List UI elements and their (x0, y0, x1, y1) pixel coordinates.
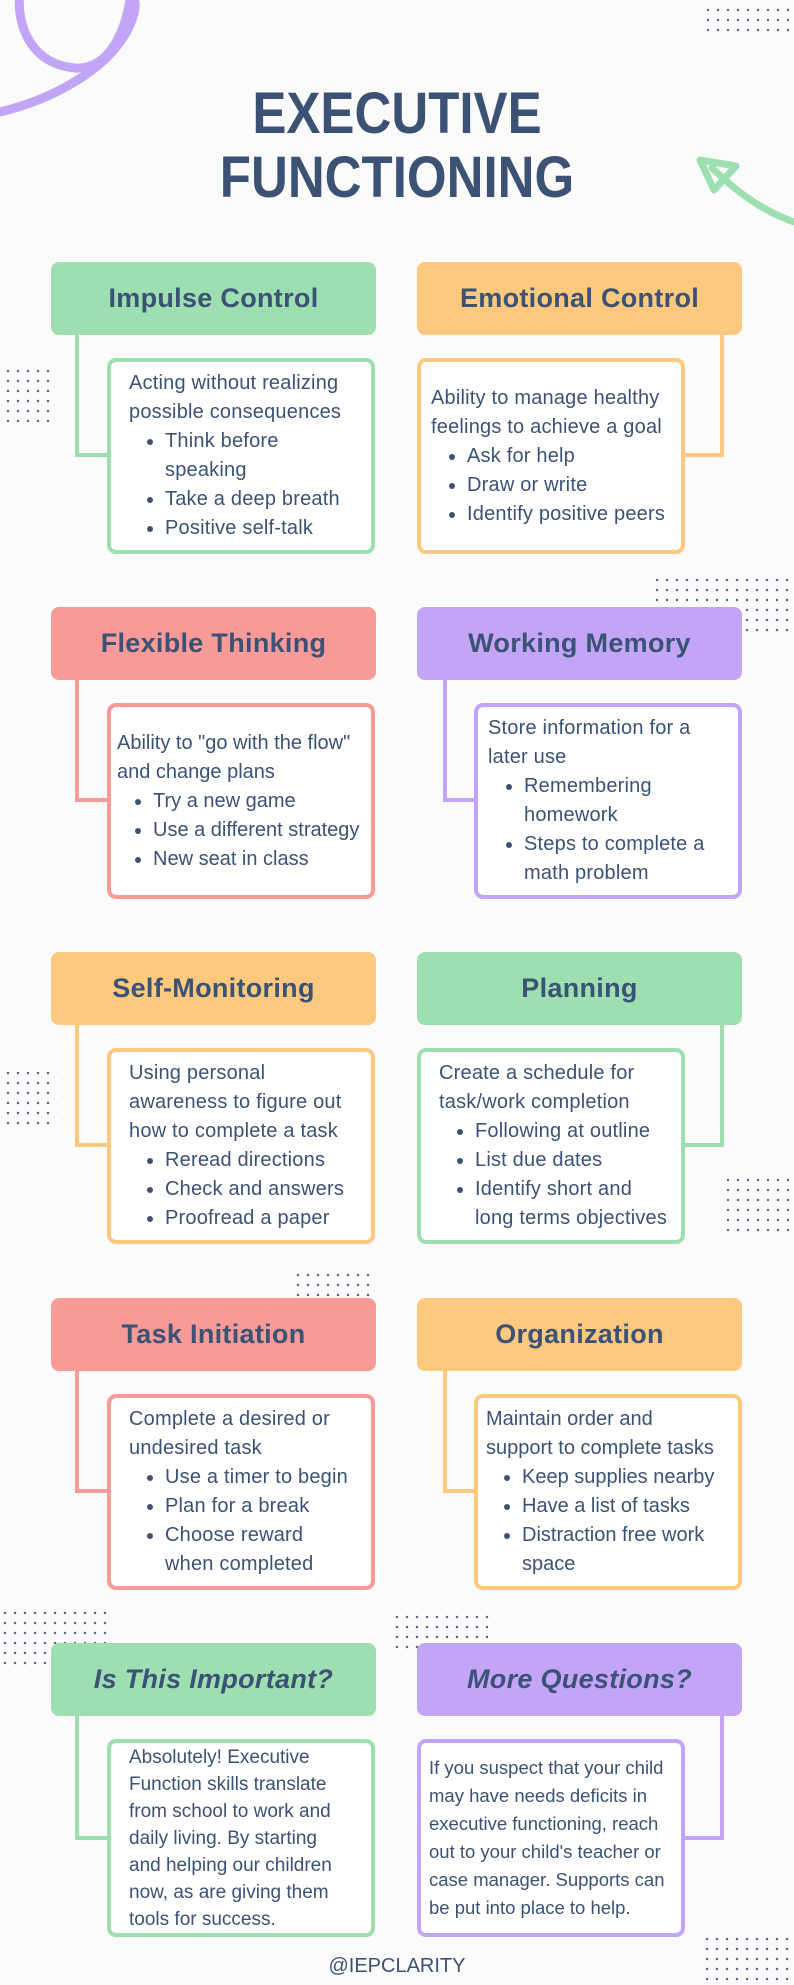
card: Organization (417, 1298, 742, 1590)
card: Flexible Thinking (51, 607, 376, 899)
card: Planning (417, 952, 742, 1244)
body: when completed (165, 1553, 313, 1575)
header: Self-Monitoring (112, 973, 315, 1003)
card: Is This Important? (51, 1643, 376, 1937)
body: Positive self-talk (165, 517, 313, 539)
header (51, 607, 376, 680)
body (107, 703, 375, 899)
body: Take a deep breath (165, 488, 340, 510)
body: Store information for a (488, 717, 690, 739)
card: Task Initiation (51, 1298, 376, 1590)
card: Impulse Control (51, 262, 376, 554)
decoration: purple loop (0, 0, 140, 116)
body: Identify short and (475, 1178, 632, 1200)
body: Ability to "go with the flow" (117, 732, 350, 754)
body: long terms objectives (475, 1207, 667, 1229)
body (417, 1048, 685, 1244)
body: out to your child's teacher or (429, 1841, 661, 1862)
body: and helping our children (129, 1854, 332, 1876)
header (51, 952, 376, 1025)
body (107, 1048, 375, 1244)
header (417, 952, 742, 1025)
header (417, 1298, 742, 1371)
footer handle: @IEPCLARITY (328, 1955, 466, 1977)
body: Try a new game (153, 790, 296, 812)
body: Following at outline (475, 1120, 650, 1142)
card: Self-Monitoring (51, 952, 376, 1244)
body: Ability to manage healthy (431, 386, 659, 408)
body: possible consequences (129, 401, 341, 423)
header (51, 262, 376, 335)
body: executive functioning, reach (429, 1813, 658, 1834)
body: Check and answers (165, 1178, 344, 1200)
header: More Questions? (467, 1664, 692, 1694)
header (417, 607, 742, 680)
body: Have a list of tasks (522, 1495, 690, 1517)
body: now, as are giving them (129, 1882, 329, 1902)
body: If you suspect that your child (429, 1757, 663, 1778)
body: Distraction free work (522, 1524, 704, 1546)
body: Keep supplies nearby (522, 1466, 714, 1488)
body: from school to work and (129, 1800, 331, 1822)
body: Draw or write (467, 474, 587, 496)
body (107, 358, 375, 554)
body: and change plans (117, 760, 275, 782)
body (474, 703, 742, 899)
header (51, 1643, 376, 1716)
body: Use a different strategy (153, 818, 359, 840)
body: Reread directions (165, 1149, 325, 1171)
header: Planning (521, 973, 638, 1003)
header (51, 1298, 376, 1371)
card: More Questions? (417, 1643, 742, 1937)
body (474, 1394, 742, 1590)
title (220, 81, 574, 210)
body: Absolutely! Executive (129, 1746, 310, 1768)
body: undesired task (129, 1437, 262, 1459)
decoration dots (703, 5, 789, 39)
body: support to complete tasks (486, 1437, 714, 1459)
header (417, 262, 742, 335)
body: Choose reward (165, 1524, 303, 1546)
body: Using personal (129, 1062, 265, 1084)
body: daily living. By starting (129, 1828, 317, 1848)
body: tools for success. (129, 1908, 276, 1930)
header: Emotional Control (460, 283, 699, 313)
body: Remembering (524, 775, 652, 797)
body: Complete a desired or (129, 1408, 330, 1430)
title: EXECUTIVE (252, 81, 542, 146)
body: Acting without realizing (129, 372, 338, 394)
header: Flexible Thinking (101, 628, 326, 658)
body (417, 358, 685, 554)
body: Steps to complete a (524, 833, 705, 855)
body: New seat in class (153, 848, 309, 870)
body (107, 1394, 375, 1590)
card: Emotional Control (417, 262, 742, 554)
title: FUNCTIONING (220, 145, 574, 210)
body: speaking (165, 459, 247, 481)
decoration: green arrow (696, 156, 794, 226)
body: feelings to achieve a goal (431, 416, 662, 438)
body: case manager. Supports can (429, 1869, 665, 1890)
header: Task Initiation (121, 1319, 306, 1349)
header: Working Memory (468, 628, 691, 658)
body: later use (488, 746, 567, 768)
body: be put into place to help. (429, 1897, 631, 1918)
body: homework (524, 804, 618, 826)
body: awareness to figure out (129, 1091, 342, 1113)
body: Proofread a paper (165, 1207, 330, 1229)
body: how to complete a task (129, 1120, 338, 1142)
body (417, 1739, 685, 1937)
header: Impulse Control (108, 283, 318, 313)
body: Create a schedule for (439, 1062, 634, 1084)
body: task/work completion (439, 1091, 630, 1113)
body: List due dates (475, 1149, 602, 1171)
body: Function skills translate (129, 1774, 326, 1794)
body (107, 1739, 375, 1937)
body: Plan for a break (165, 1495, 309, 1517)
body: Ask for help (467, 444, 575, 466)
body: Think before (165, 430, 279, 452)
body: space (522, 1553, 575, 1575)
body: math problem (524, 862, 649, 884)
body: Use a timer to begin (165, 1466, 348, 1488)
header (417, 1643, 742, 1716)
card: Working Memory (417, 607, 742, 899)
body: Maintain order and (486, 1408, 653, 1430)
body: may have needs deficits in (429, 1785, 647, 1806)
header: Organization (495, 1319, 664, 1349)
header: Is This Important? (94, 1664, 333, 1694)
body: Identify positive peers (467, 502, 665, 524)
